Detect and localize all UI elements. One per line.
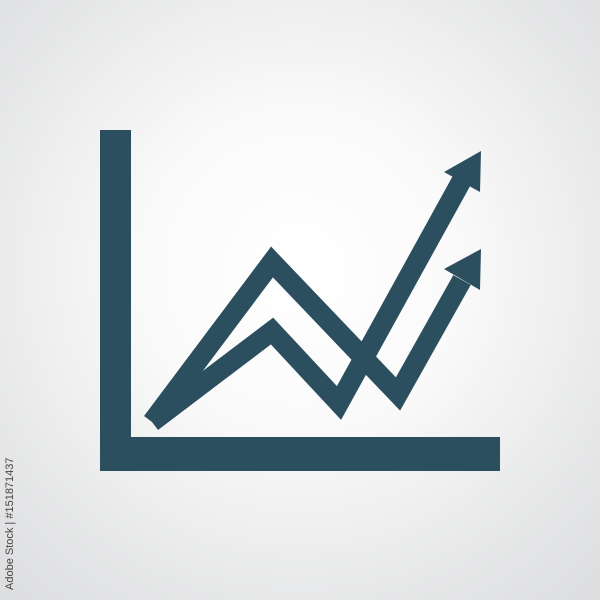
arrowhead: upper	[444, 151, 481, 192]
line: upper path to lower arrow	[152, 262, 462, 422]
line: lower path to upper arrow	[152, 180, 462, 422]
axes	[100, 130, 500, 471]
arrowhead: lower	[444, 249, 481, 290]
watermark id text: Adobe Stock | #151871437	[4, 457, 16, 590]
